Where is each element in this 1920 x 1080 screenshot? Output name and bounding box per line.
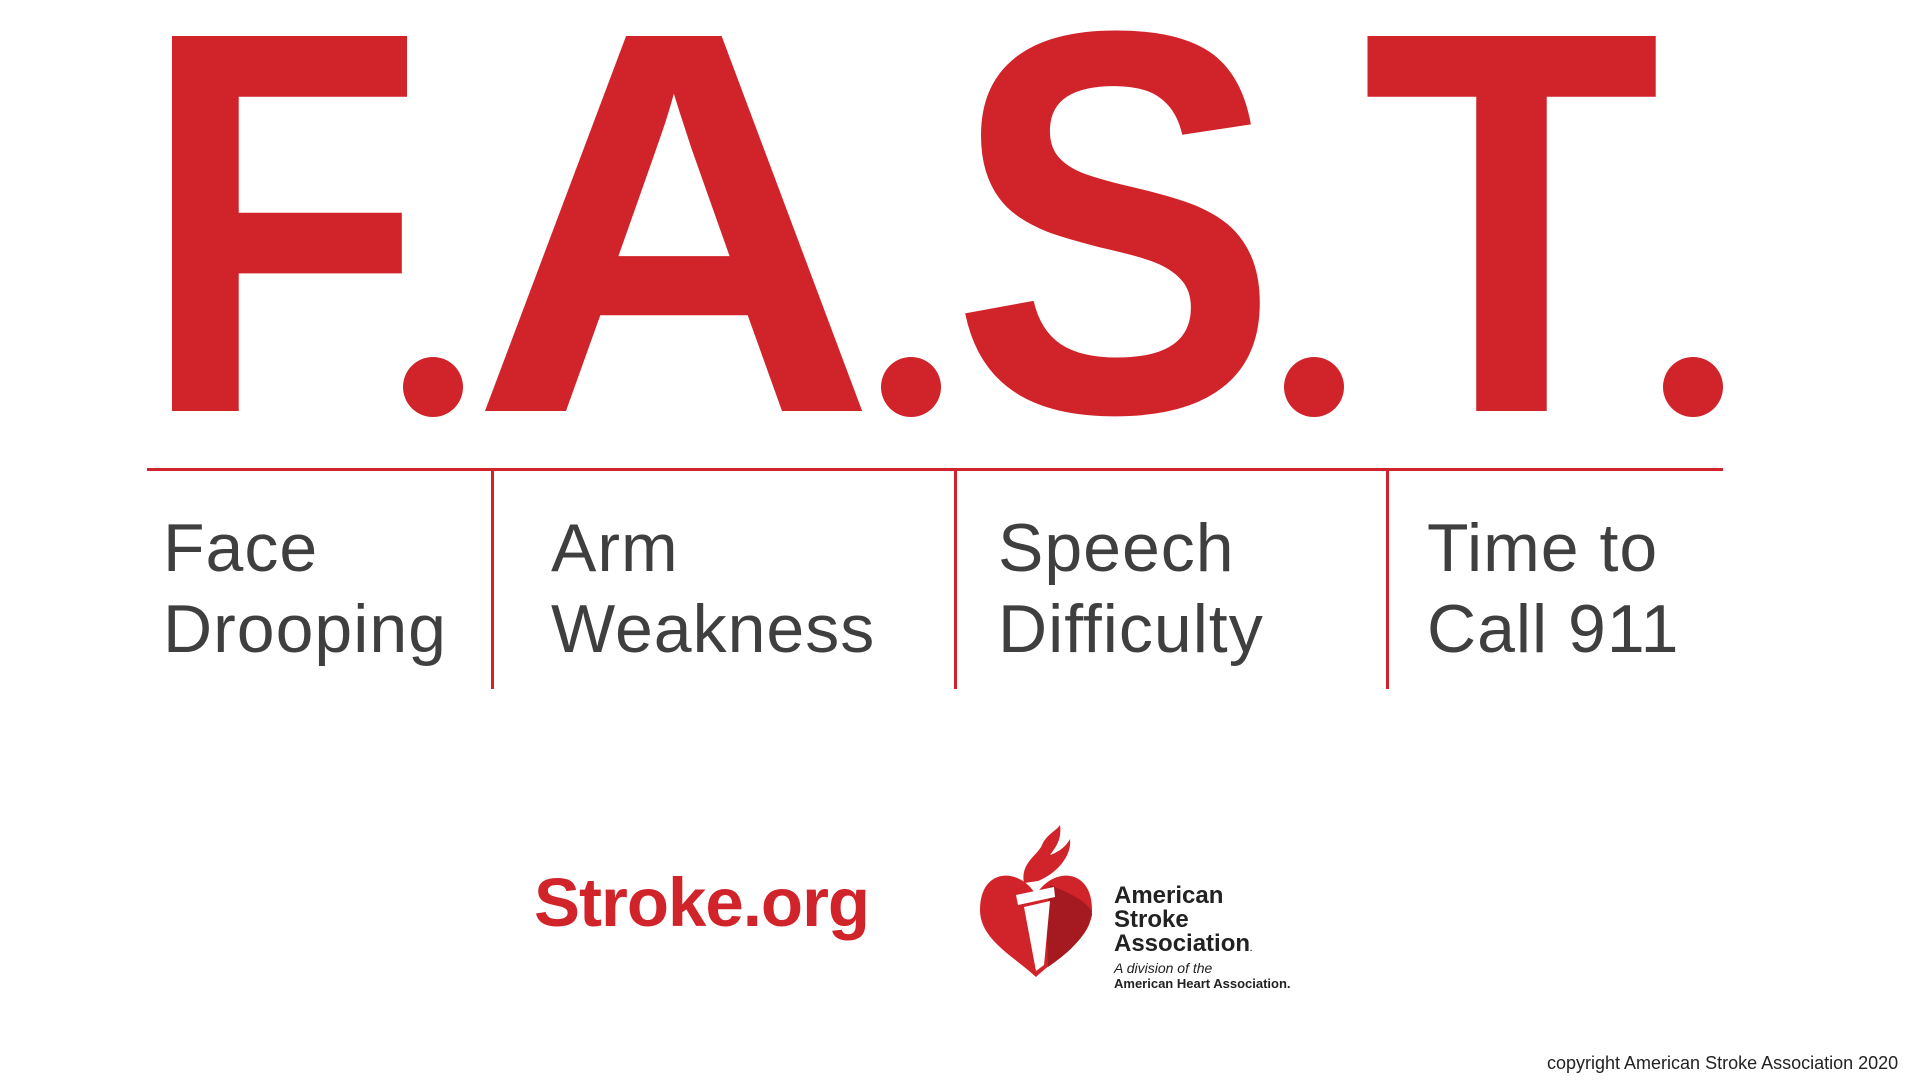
item: Speech Difficulty (998, 510, 1264, 667)
item: Time to Call 911 (1427, 510, 1679, 667)
item: Face Drooping: Face (163, 510, 318, 586)
item: Arm Weakness (551, 510, 875, 667)
item: Face Drooping (163, 510, 447, 667)
dot 2 (881, 357, 941, 417)
dot 1 (403, 357, 463, 417)
logo: American Stroke Association (980, 825, 1291, 991)
logo: American Stroke Association: American Heart Association. (1114, 976, 1291, 991)
item: Time to Call 911: Time to (1427, 510, 1658, 586)
dot 4 (1663, 357, 1723, 417)
Stroke.org link text: Stroke.org (534, 864, 869, 941)
icon: heart and torch (980, 825, 1092, 977)
item: Speech Difficulty: Difficulty (998, 591, 1264, 667)
item: Arm Weakness: Weakness (551, 591, 875, 667)
logo text: Stroke (1114, 906, 1189, 933)
item: Arm Weakness: Arm (551, 510, 679, 586)
title: F.A.S.T. (141, 0, 1723, 440)
item: Speech Difficulty: Speech (998, 510, 1235, 586)
item: Face Drooping: Drooping (163, 591, 447, 667)
logo: American Stroke Association: A division of the (1114, 960, 1212, 976)
logo text (1114, 882, 1252, 957)
dot 3 (1284, 357, 1344, 417)
copyright: copyright American Stroke Association 2020 (1547, 1053, 1898, 1073)
item: Time to Call 911: Call 911 (1427, 591, 1679, 667)
logo text: American (1114, 882, 1223, 909)
logo text: Association. (1114, 930, 1252, 957)
